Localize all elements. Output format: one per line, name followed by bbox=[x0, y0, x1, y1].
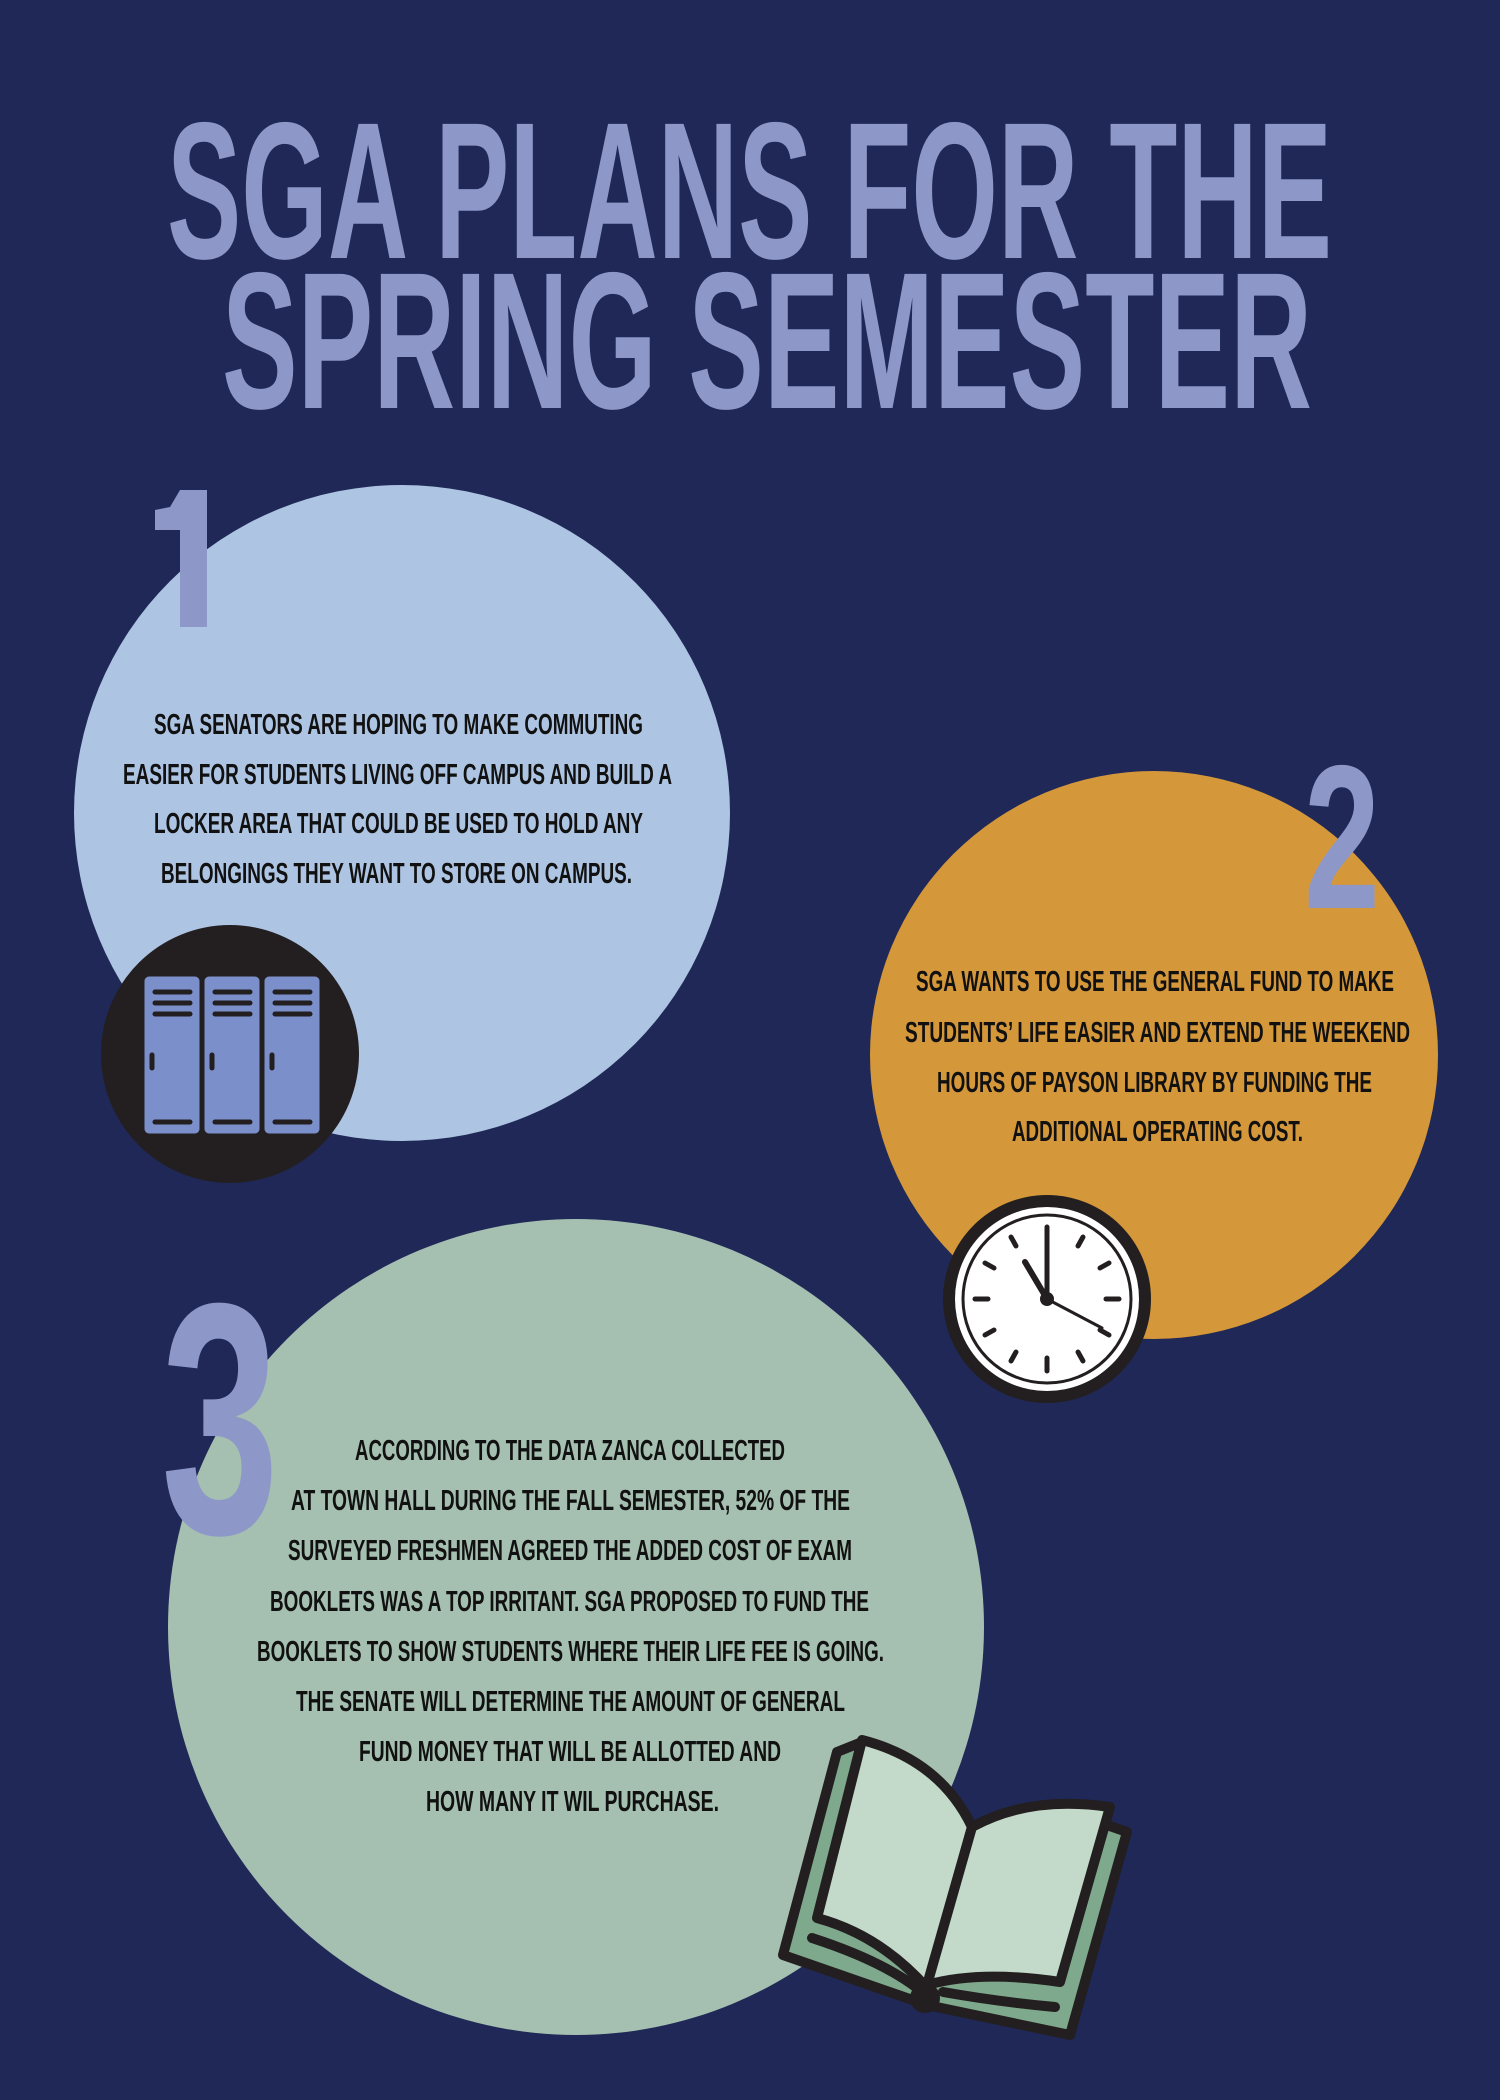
text: plan 3: HOW MANY IT WIL PURCHASE. bbox=[426, 1786, 719, 1818]
text: plan 3: FUND MONEY THAT WILL BE ALLOTTED AND bbox=[359, 1736, 781, 1768]
text: plan 3: BOOKLETS WAS A TOP IRRITANT. SGA PROPOSED TO FUND THE bbox=[270, 1586, 869, 1618]
text: plan 1: BELONGINGS THEY WANT TO STORE ON CAMPUS. bbox=[161, 858, 632, 890]
number 2: 2 bbox=[1304, 723, 1380, 952]
number 1 bbox=[155, 490, 207, 627]
text: plan 3 bbox=[257, 1435, 884, 1818]
text: plan 1: LOCKER AREA THAT COULD BE USED TO HOLD ANY bbox=[154, 808, 643, 840]
icon: open book bbox=[783, 1740, 1127, 2035]
icon: lockers bbox=[101, 925, 359, 1183]
text: plan 3: THE SENATE WILL DETERMINE THE AMOUNT OF GENERAL bbox=[296, 1686, 845, 1718]
panel: plan 2 bbox=[870, 723, 1438, 1403]
number 3: 3 bbox=[161, 1234, 279, 1603]
text: plan 3: BOOKLETS TO SHOW STUDENTS WHERE THEIR LIFE FEE IS GOING. bbox=[257, 1636, 884, 1668]
panel: plan 3 bbox=[161, 1219, 1127, 2035]
text: plan 1 bbox=[123, 709, 672, 890]
panel: plan 1 bbox=[74, 485, 730, 1183]
text: plan 3: ACCORDING TO THE DATA ZANCA COLLECTED bbox=[355, 1435, 785, 1467]
text: plan 1: EASIER FOR STUDENTS LIVING OFF CAMPUS AND BUILD A bbox=[123, 759, 672, 791]
icon: clock bbox=[943, 1195, 1151, 1403]
text: plan 2: ADDITIONAL OPERATING COST. bbox=[1012, 1116, 1303, 1148]
title bbox=[167, 82, 1332, 450]
text: plan 2 bbox=[905, 966, 1410, 1148]
text: plan 3: AT TOWN HALL DURING THE FALL SEMESTER, 52% OF THE bbox=[291, 1485, 850, 1517]
text: plan 3: SURVEYED FRESHMEN AGREED THE ADDED COST OF EXAM bbox=[288, 1535, 852, 1567]
text: plan 1: SGA SENATORS ARE HOPING TO MAKE COMMUTING bbox=[154, 709, 643, 741]
